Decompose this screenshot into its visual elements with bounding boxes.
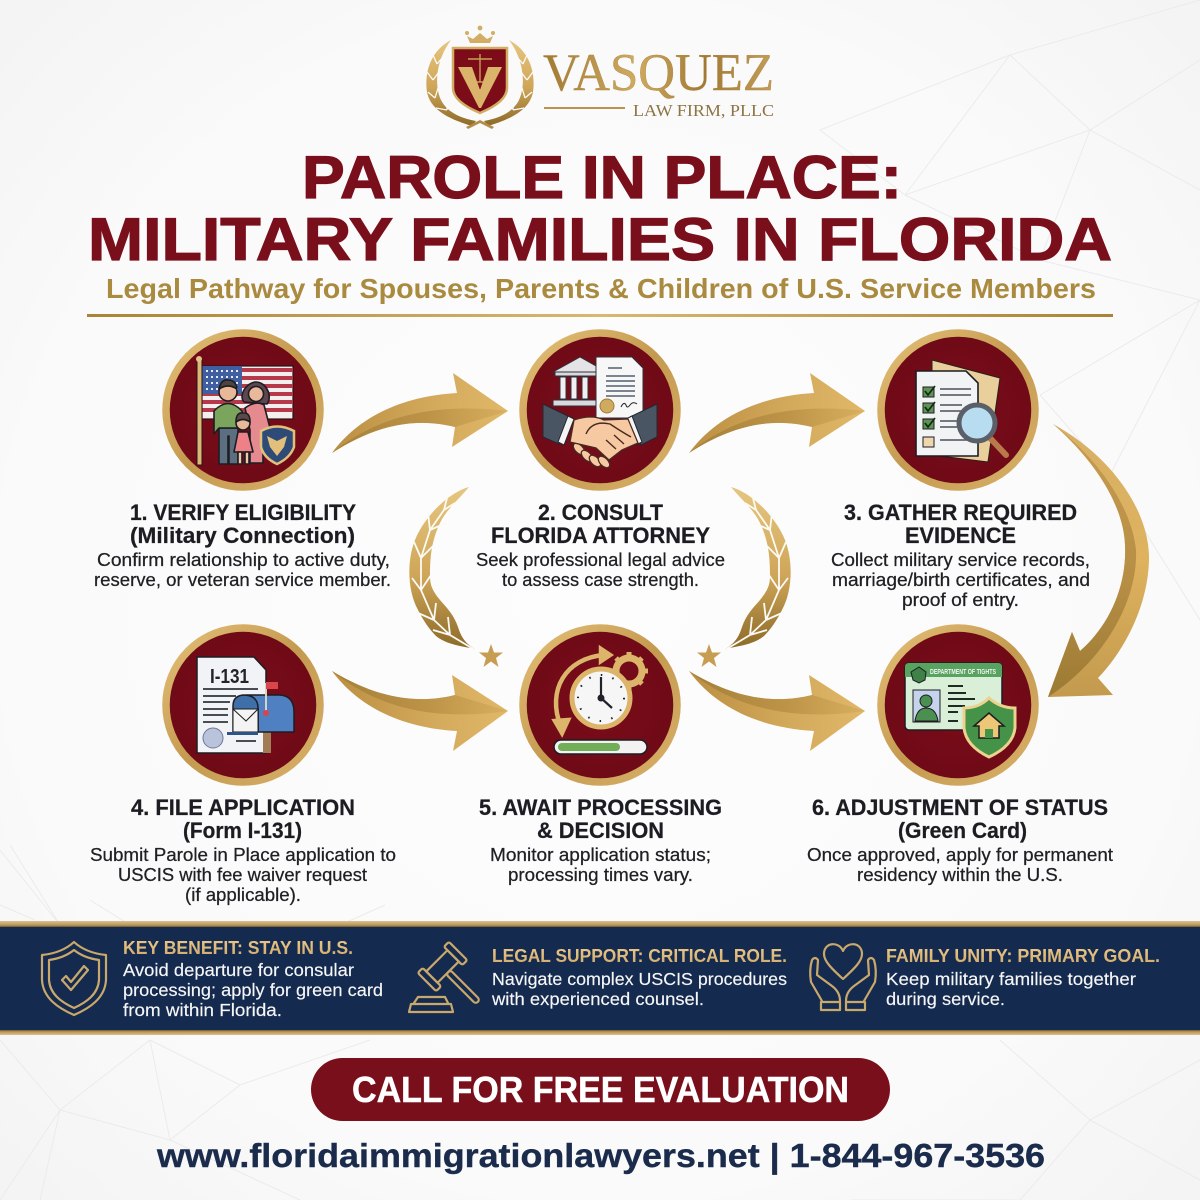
arrow: step 5 to 6 [689, 671, 865, 751]
arrow: step 3 to 6 [1048, 424, 1149, 697]
folders [932, 360, 1000, 462]
step 6 text [807, 795, 1113, 885]
step 1 text: 1. VERIFY ELIGIBILITY [130, 500, 356, 525]
step 1 text: reserve, or veteran service member. [94, 570, 391, 590]
contact line: www.floridaimmigrationlawyers.net | 1-844-967-3536 [156, 1137, 1045, 1174]
step 4 text: (Form I-131) [183, 818, 302, 843]
step 5 text [479, 795, 722, 885]
flagpole [196, 356, 202, 465]
arrow: step 2 to 3 [689, 373, 865, 453]
step 6 text: (Green Card) [898, 818, 1027, 843]
logo name: VASQUEZ [543, 44, 774, 102]
benefit 3 text: FAMILY UNITY: PRIMARY GOAL. [886, 946, 1160, 966]
benefit 1 text: Avoid departure for consular [123, 960, 354, 980]
flag [202, 366, 293, 419]
logo: Vasquez Law Firm [426, 26, 774, 129]
step 2 text: 2. CONSULT [538, 500, 664, 525]
step 1 text: Confirm relationship to active duty, [97, 550, 390, 570]
step 5 text: Monitor application status; [490, 845, 711, 865]
step 1 text [94, 500, 391, 590]
benefit 1 text [123, 938, 383, 1020]
step 2 text: FLORIDA ATTORNEY [491, 523, 710, 548]
star: right [697, 644, 721, 667]
mailbox [227, 682, 294, 753]
circular arrow [555, 649, 610, 733]
title [88, 144, 1112, 273]
benefit 2 text [491, 946, 787, 1009]
icon: attorney handshake [523, 333, 677, 487]
icon: gavel [409, 942, 493, 1017]
step 6 text: Once approved, apply for permanent [807, 845, 1113, 865]
courthouse [553, 357, 596, 406]
icon: I-131 form and mailbox [166, 628, 320, 782]
benefit 1 text: processing; apply for green card [123, 980, 383, 1000]
logo scales [464, 54, 496, 90]
title: PAROLE IN PLACE: [302, 144, 902, 211]
arrow: step 4 to 5 [332, 671, 508, 751]
icon: family with flag [166, 333, 320, 487]
step 2 text: to assess case strength. [502, 570, 699, 590]
step 1 text: (Military Connection) [130, 523, 355, 548]
step 6 text: residency within the U.S. [857, 865, 1063, 885]
step 4 text: USCIS with fee waiver request [118, 865, 367, 885]
panel: benefits band [0, 921, 1200, 1035]
call to action button: CALL FOR FREE EVALUATION [352, 1069, 849, 1110]
logo crown [465, 26, 495, 43]
title rule [87, 314, 1113, 317]
form document [197, 657, 266, 753]
benefit 2 text: Navigate complex USCIS procedures [492, 969, 787, 989]
benefit 3 text: during service. [886, 989, 1005, 1009]
step 5 text: processing times vary. [508, 865, 693, 885]
benefit 1 text: KEY BENEFIT: STAY IN U.S. [123, 938, 353, 958]
girl [234, 413, 253, 464]
gear [610, 652, 648, 690]
title: MILITARY FAMILIES IN FLORIDA [88, 206, 1112, 273]
arrow: step 1 to 2 [332, 373, 508, 453]
benefit 3 text: Keep military families together [886, 969, 1136, 989]
step 3 text: 3. GATHER REQUIRED [844, 500, 1077, 525]
legal document [596, 357, 643, 418]
call to action button [311, 1058, 890, 1121]
subtitle: Legal Pathway for Spouses, Parents & Children of U.S. Service Members [106, 273, 1096, 304]
clock [572, 669, 630, 727]
step 3 text: Collect military service records, [831, 550, 1090, 570]
home shield [964, 698, 1015, 757]
logo V [458, 67, 502, 108]
step 6 text: 6. ADJUSTMENT OF STATUS [812, 795, 1108, 820]
magnifier [959, 405, 1006, 455]
step 5 text: & DECISION [537, 818, 664, 843]
military shield [261, 426, 294, 464]
icon: green card [881, 628, 1035, 782]
step 3 text: marriage/birth certificates, and [832, 570, 1090, 590]
card [905, 663, 1002, 730]
step 4 text [90, 795, 396, 905]
icon: evidence documents [881, 333, 1035, 487]
benefit 3 text [886, 946, 1160, 1009]
step 3 text: EVIDENCE [905, 523, 1016, 548]
step 2 text: Seek professional legal advice [476, 550, 725, 570]
laurel: left [409, 487, 475, 650]
icon: processing clock [523, 628, 677, 782]
step 3 text: proof of entry. [902, 590, 1019, 610]
benefit 2 text: LEGAL SUPPORT: CRITICAL ROLE. [492, 946, 787, 966]
logo subtitle: LAW FIRM, PLLC [633, 101, 774, 120]
progress bar [554, 740, 647, 754]
logo divider [544, 107, 625, 109]
laurel: right [725, 487, 791, 650]
form document: I-131 [210, 666, 249, 688]
step 5 text: 5. AWAIT PROCESSING [479, 795, 722, 820]
icon: shield check [42, 942, 106, 1015]
logo shield [453, 48, 507, 113]
handshake [543, 404, 657, 470]
man [214, 380, 245, 464]
step 2 text [476, 500, 725, 590]
logo laurel [426, 40, 534, 129]
icon: heart in hands [810, 944, 876, 1010]
star: left [479, 644, 503, 667]
checklist [916, 371, 978, 456]
step 3 text [831, 500, 1090, 610]
woman [242, 382, 270, 463]
step 4 text: (if applicable). [185, 885, 301, 905]
benefit 1 text: from within Florida. [123, 1000, 282, 1020]
card: DEPARTMENT OF TIGHTS [930, 669, 996, 676]
benefit 2 text: with experienced counsel. [491, 989, 704, 1009]
step 4 text: 4. FILE APPLICATION [131, 795, 355, 820]
step 4 text: Submit Parole in Place application to [90, 845, 396, 865]
